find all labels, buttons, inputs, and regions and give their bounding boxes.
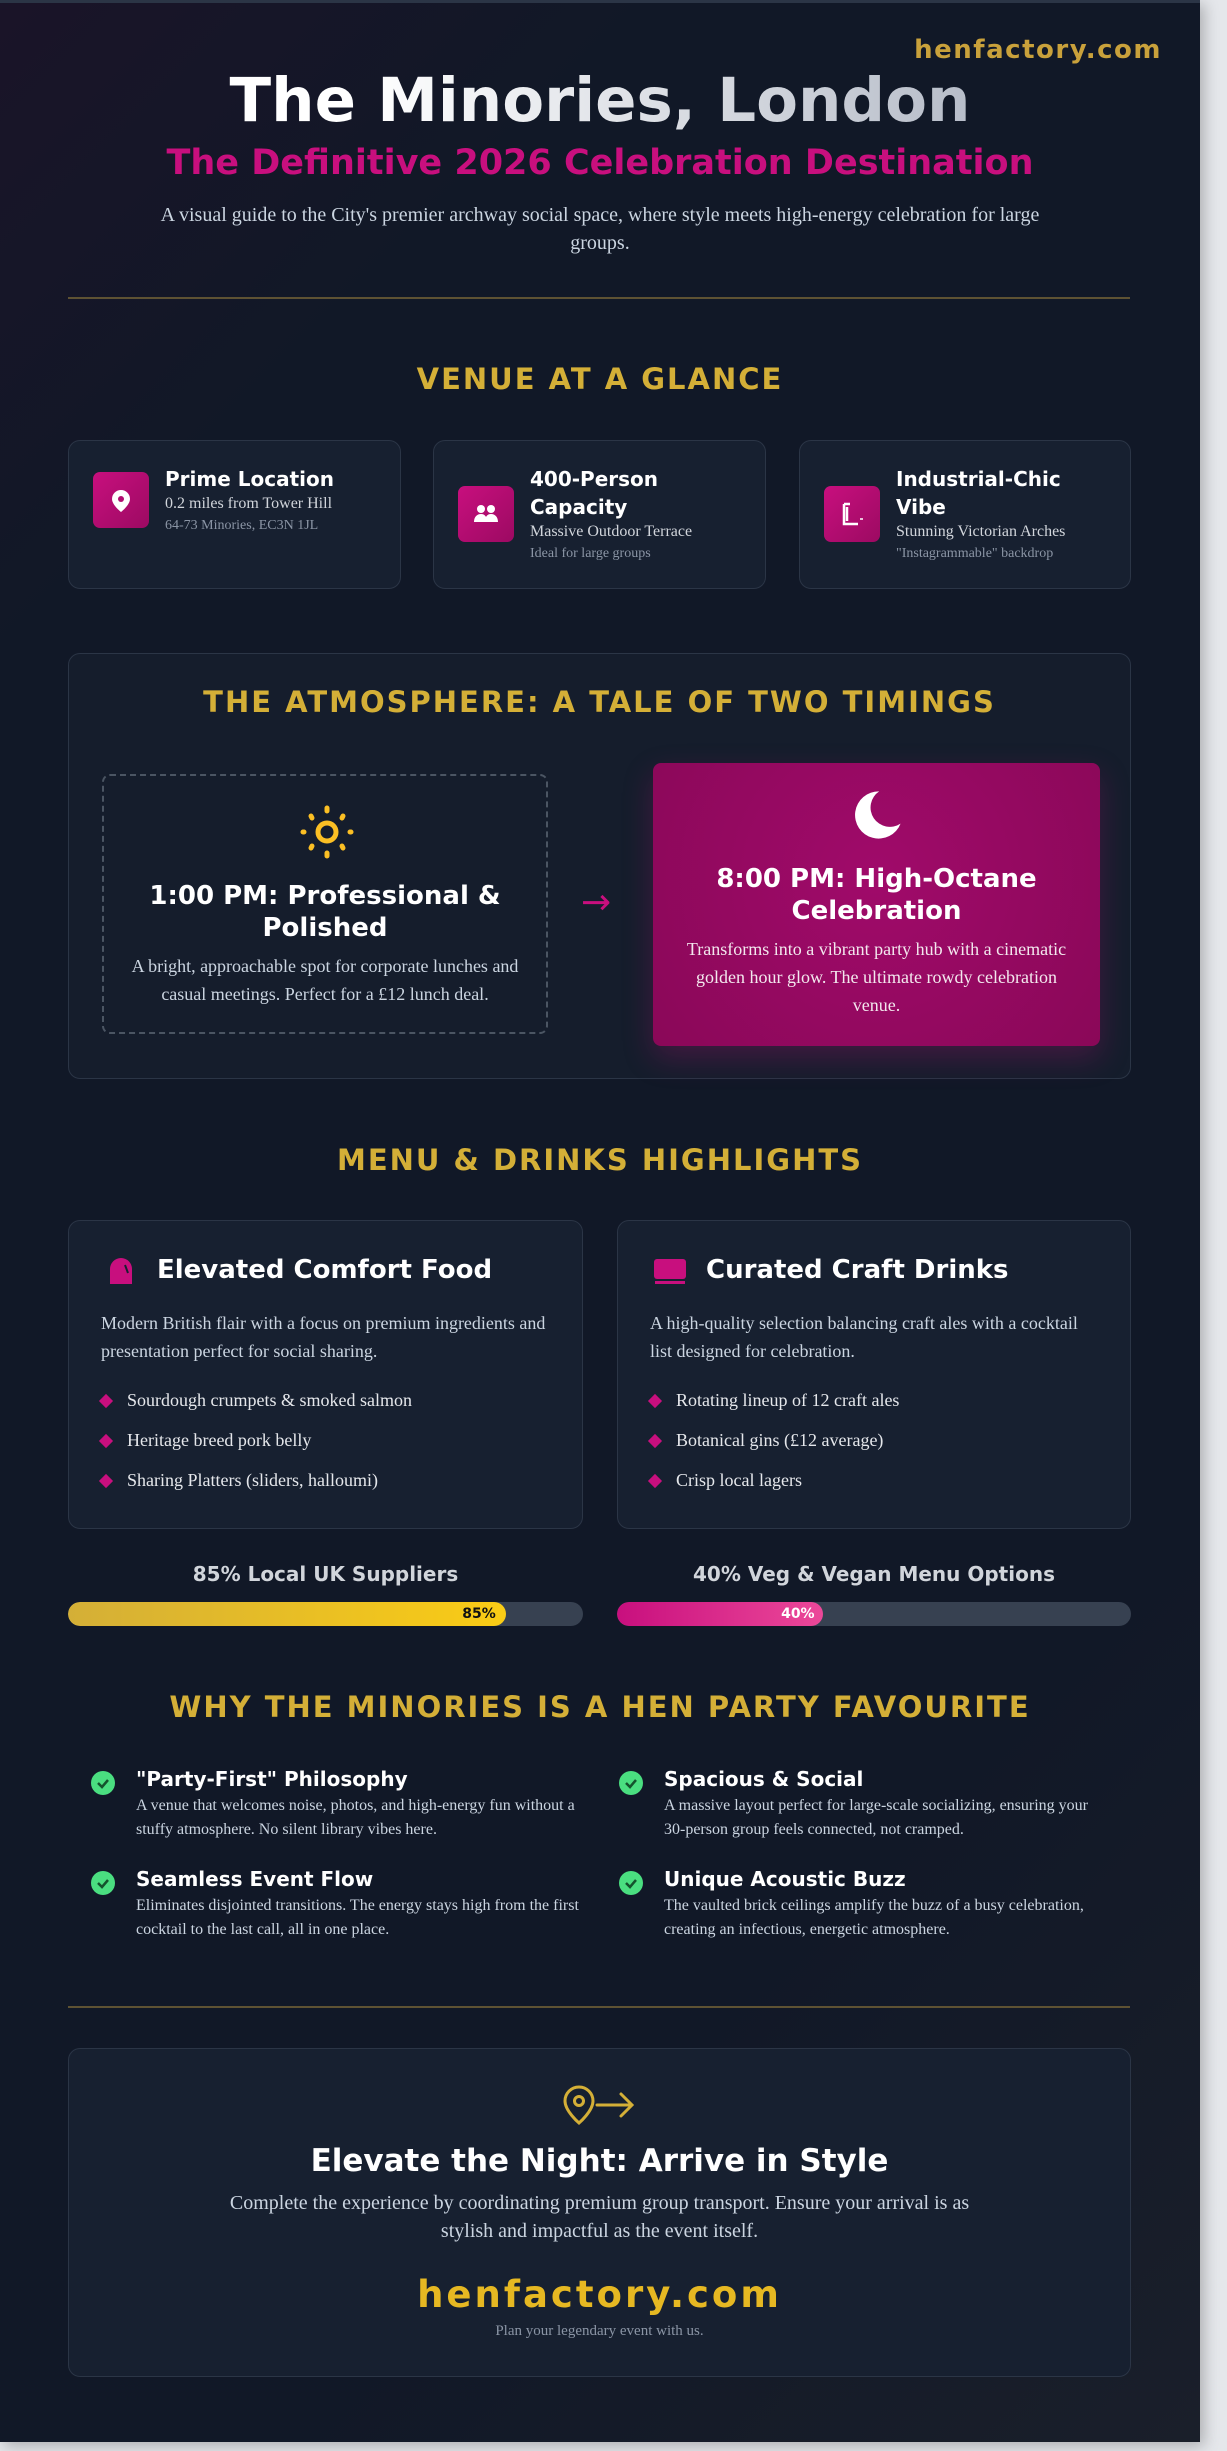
- card: prime location: 0.2 miles from Tower Hill: [165, 495, 332, 512]
- box: night: Celebration: [792, 896, 961, 926]
- icon: arch: [824, 486, 880, 542]
- card: drinks: A high-quality selection balancing craft ales with a cocktail list designed for celebration.: [650, 1313, 1078, 1361]
- stat: local suppliers: 85% Local UK Suppliers: [193, 1562, 458, 1586]
- title: The Minories, London: [230, 65, 970, 136]
- panel: atmosphere: [68, 653, 1131, 1079]
- card: industrial vibe: Stunning Victorian Arches: [896, 523, 1065, 540]
- card: prime location: [68, 440, 401, 589]
- card: industrial vibe: Vibe: [896, 495, 946, 519]
- list: food: [99, 1390, 412, 1490]
- box: night: Transforms into a vibrant party hub with a cinematic golden hour glow. The ultimate rowdy celebration venue.: [687, 939, 1066, 1015]
- heading: atmosphere: THE ATMOSPHERE: A TALE OF TWO TIMINGS: [203, 685, 996, 719]
- card: drinks: Curated Craft Drinks: [706, 1255, 1009, 1285]
- box: night: 8:00 PM: High-Octane: [716, 864, 1037, 894]
- feature: acoustic: Unique Acoustic Buzz: [664, 1867, 906, 1891]
- stat: veg options: 40% Veg & Vegan Menu Options: [693, 1562, 1055, 1586]
- card: industrial vibe: Industrial-Chic: [896, 467, 1061, 491]
- intro text: A visual guide to the City's premier archway social space, where style meets high-energy celebration for large groups.: [161, 204, 1039, 254]
- card: capacity: Capacity: [530, 495, 627, 519]
- icon: people: [458, 486, 514, 542]
- box: night: [653, 763, 1100, 1046]
- card: drinks: [617, 1220, 1131, 1529]
- title: [0, 65, 1200, 137]
- card: food: [68, 1220, 583, 1529]
- arrow: →: [581, 882, 611, 923]
- box: daytime: A bright, approachable spot for corporate lunches and casual meetings. Perfect for a £12 lunch deal.: [132, 956, 518, 1004]
- list: food: Sourdough crumpets & smoked salmon: [127, 1390, 412, 1410]
- list: food: Heritage breed pork belly: [127, 1430, 311, 1450]
- card: capacity: [433, 440, 766, 589]
- list: drinks: Botanical gins (£12 average): [676, 1430, 883, 1450]
- card: prime location: Prime Location: [165, 467, 334, 491]
- card: prime location: 64-73 Minories, EC3N 1JL: [165, 518, 318, 533]
- box: daytime: [102, 774, 548, 1034]
- stat: local suppliers: [68, 1562, 583, 1626]
- card: capacity: Ideal for large groups: [530, 546, 651, 561]
- icon: moon: [855, 791, 900, 839]
- list: food: Sharing Platters (sliders, halloumi): [127, 1470, 378, 1490]
- card: food: Modern British flair with a focus on premium ingredients and presentation perfect for social sharing.: [101, 1313, 545, 1361]
- heading: why: WHY THE MINORIES IS A HEN PARTY FAVOURITE: [169, 1690, 1031, 1724]
- feature: spacious: [619, 1767, 1088, 1838]
- subtitle: The Definitive 2026 Celebration Destination: [167, 143, 1033, 183]
- panel: call to action: Complete the experience by coordinating premium group transport. Ensure your arrival is as stylish and impactful as the event itself.: [230, 2192, 969, 2242]
- feature: party first: A venue that welcomes noise, photos, and high-energy fun without a stuffy atmosphere. No silent library vibes here.: [136, 1797, 575, 1838]
- icon: sun: [300, 806, 354, 858]
- card: industrial vibe: "Instagrammable" backdrop: [896, 546, 1053, 561]
- feature: spacious: Spacious & Social: [664, 1767, 863, 1791]
- list: drinks: Crisp local lagers: [676, 1470, 802, 1490]
- card: industrial vibe: [799, 440, 1131, 589]
- heading: venue at a glance: VENUE AT A GLANCE: [417, 362, 783, 396]
- card: capacity: 400-Person: [530, 467, 658, 491]
- feature: seamless: Seamless Event Flow: [136, 1867, 373, 1891]
- stat: veg options: [617, 1562, 1131, 1626]
- feature: acoustic: [619, 1867, 1084, 1938]
- panel: call to action: Elevate the Night: Arrive in Style: [311, 2143, 888, 2179]
- panel: call to action: henfactory.com: [417, 2273, 782, 2316]
- list: drinks: [648, 1390, 899, 1490]
- brand top right: henfactory.com: [914, 35, 1162, 65]
- icon: pin: [93, 472, 149, 528]
- feature: party first: [91, 1767, 575, 1838]
- box: daytime: Polished: [262, 913, 387, 943]
- list: drinks: Rotating lineup of 12 craft ales: [676, 1390, 899, 1410]
- icon: food: [110, 1258, 132, 1284]
- panel: call to action: [68, 2048, 1131, 2377]
- feature: seamless: [91, 1867, 579, 1938]
- card: food: Elevated Comfort Food: [157, 1255, 492, 1285]
- stat: veg options: 40%: [781, 1606, 815, 1622]
- feature: seamless: Eliminates disjointed transitions. The energy stays high from the first cocktail to the last call, all in one place.: [136, 1897, 579, 1938]
- card: capacity: Massive Outdoor Terrace: [530, 523, 692, 540]
- feature: party first: "Party-First" Philosophy: [136, 1767, 408, 1791]
- icon: drinks: [654, 1259, 686, 1284]
- feature: spacious: A massive layout perfect for large-scale socializing, ensuring your 30-person group feels connected, not cramped.: [664, 1797, 1088, 1838]
- feature: acoustic: The vaulted brick ceilings amplify the buzz of a busy celebration, creating an infectious, energetic atmosphere.: [664, 1897, 1084, 1938]
- stat: local suppliers: 85%: [462, 1606, 496, 1622]
- icon: pin arrow: [564, 2086, 634, 2125]
- box: daytime: 1:00 PM: Professional &: [149, 881, 501, 911]
- panel: call to action: Plan your legendary event with us.: [495, 2323, 704, 2339]
- heading: menu: MENU & DRINKS HIGHLIGHTS: [337, 1143, 863, 1177]
